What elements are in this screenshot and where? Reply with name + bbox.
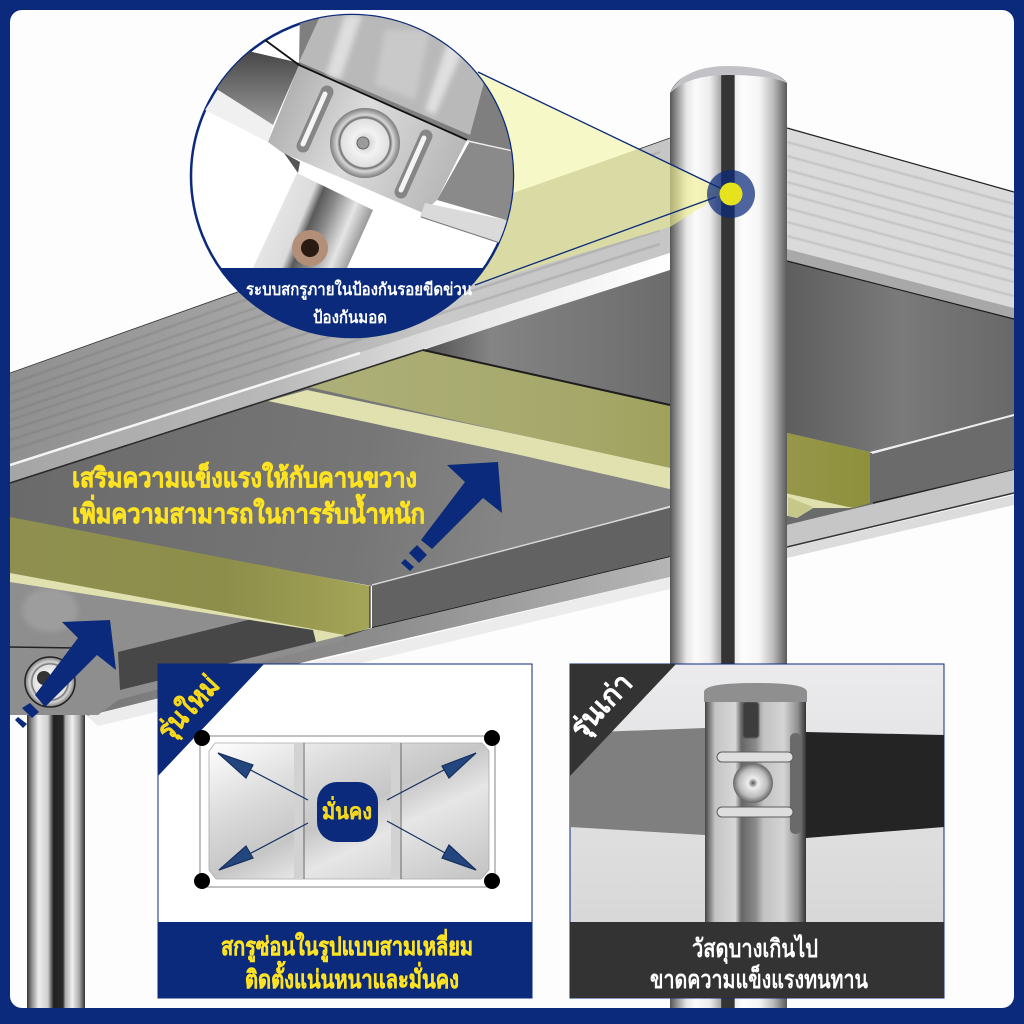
corner tag new — [158, 664, 264, 776]
caption old: วัสดุบางเกินไป — [692, 933, 818, 965]
lower left bracket — [10, 575, 372, 715]
bracket plate — [268, 65, 467, 213]
callout text: ป้องกันมอด — [313, 308, 387, 327]
lower rail left — [372, 507, 670, 628]
grommet — [292, 230, 328, 266]
yellow headline: เสริมความแข็งแรงให้กับคานขวาง — [72, 460, 417, 493]
yellow projection over pole — [670, 164, 724, 227]
caption old: ขาดความแข็งแรงทนทาน — [650, 964, 868, 994]
olive reinforcing beam lower — [10, 517, 370, 642]
old pole — [704, 683, 807, 923]
silver lip right — [787, 470, 1014, 558]
centre badge: มั่นคง — [322, 795, 372, 824]
left pole — [27, 715, 85, 1008]
yellow projection over white — [476, 70, 638, 193]
callout text: ระบบสกรูภายในป้องกันรอยขีดข่วน — [246, 279, 472, 301]
corner tag old — [570, 664, 676, 776]
top shelf lower band left — [10, 253, 670, 483]
slots — [303, 92, 327, 146]
silver lip left — [87, 557, 670, 726]
caption new: ติดตั้งแน่นหนาและมั่นคง — [245, 960, 459, 994]
caption new — [158, 922, 532, 998]
callout banner — [222, 268, 482, 336]
yellow headline: เพิ่มความสามารถในการรับน้ำหนัก — [72, 493, 425, 529]
yellow projection over shelf — [475, 149, 670, 285]
yellow headline — [72, 460, 425, 529]
tag text new: รุ่นใหม่ — [150, 668, 227, 747]
zoom callout circle — [180, 10, 520, 343]
arrow: lower beam — [15, 620, 116, 728]
olive reinforcing beam upper — [268, 350, 870, 518]
tube — [253, 173, 373, 268]
panel: old model — [564, 664, 944, 998]
screw — [330, 108, 400, 178]
upper background — [299, 10, 520, 152]
shelf plate diagram — [194, 730, 500, 889]
old beams — [570, 728, 944, 838]
shelf underside right — [787, 260, 1014, 452]
caption new: สกรูซ่อนในรูปแบบสามเหลี่ยม — [221, 929, 473, 963]
projection outlines — [475, 72, 722, 285]
callout text — [246, 279, 472, 327]
highlight dot on pole — [707, 170, 755, 218]
lower rail right — [787, 415, 1014, 525]
top shelf front face right — [787, 128, 1014, 319]
caption old — [570, 922, 944, 998]
top shelf front face left — [10, 138, 670, 465]
panel: new model — [150, 664, 532, 998]
tag text old: รุ่นเก่า — [564, 667, 640, 745]
diagonal arrows — [218, 753, 476, 870]
main pole — [670, 66, 787, 1008]
shelf underside left — [10, 387, 870, 586]
shelf underside upper dark zone — [423, 268, 670, 405]
arrow: upper beam — [401, 462, 502, 571]
centre badge — [317, 782, 378, 842]
